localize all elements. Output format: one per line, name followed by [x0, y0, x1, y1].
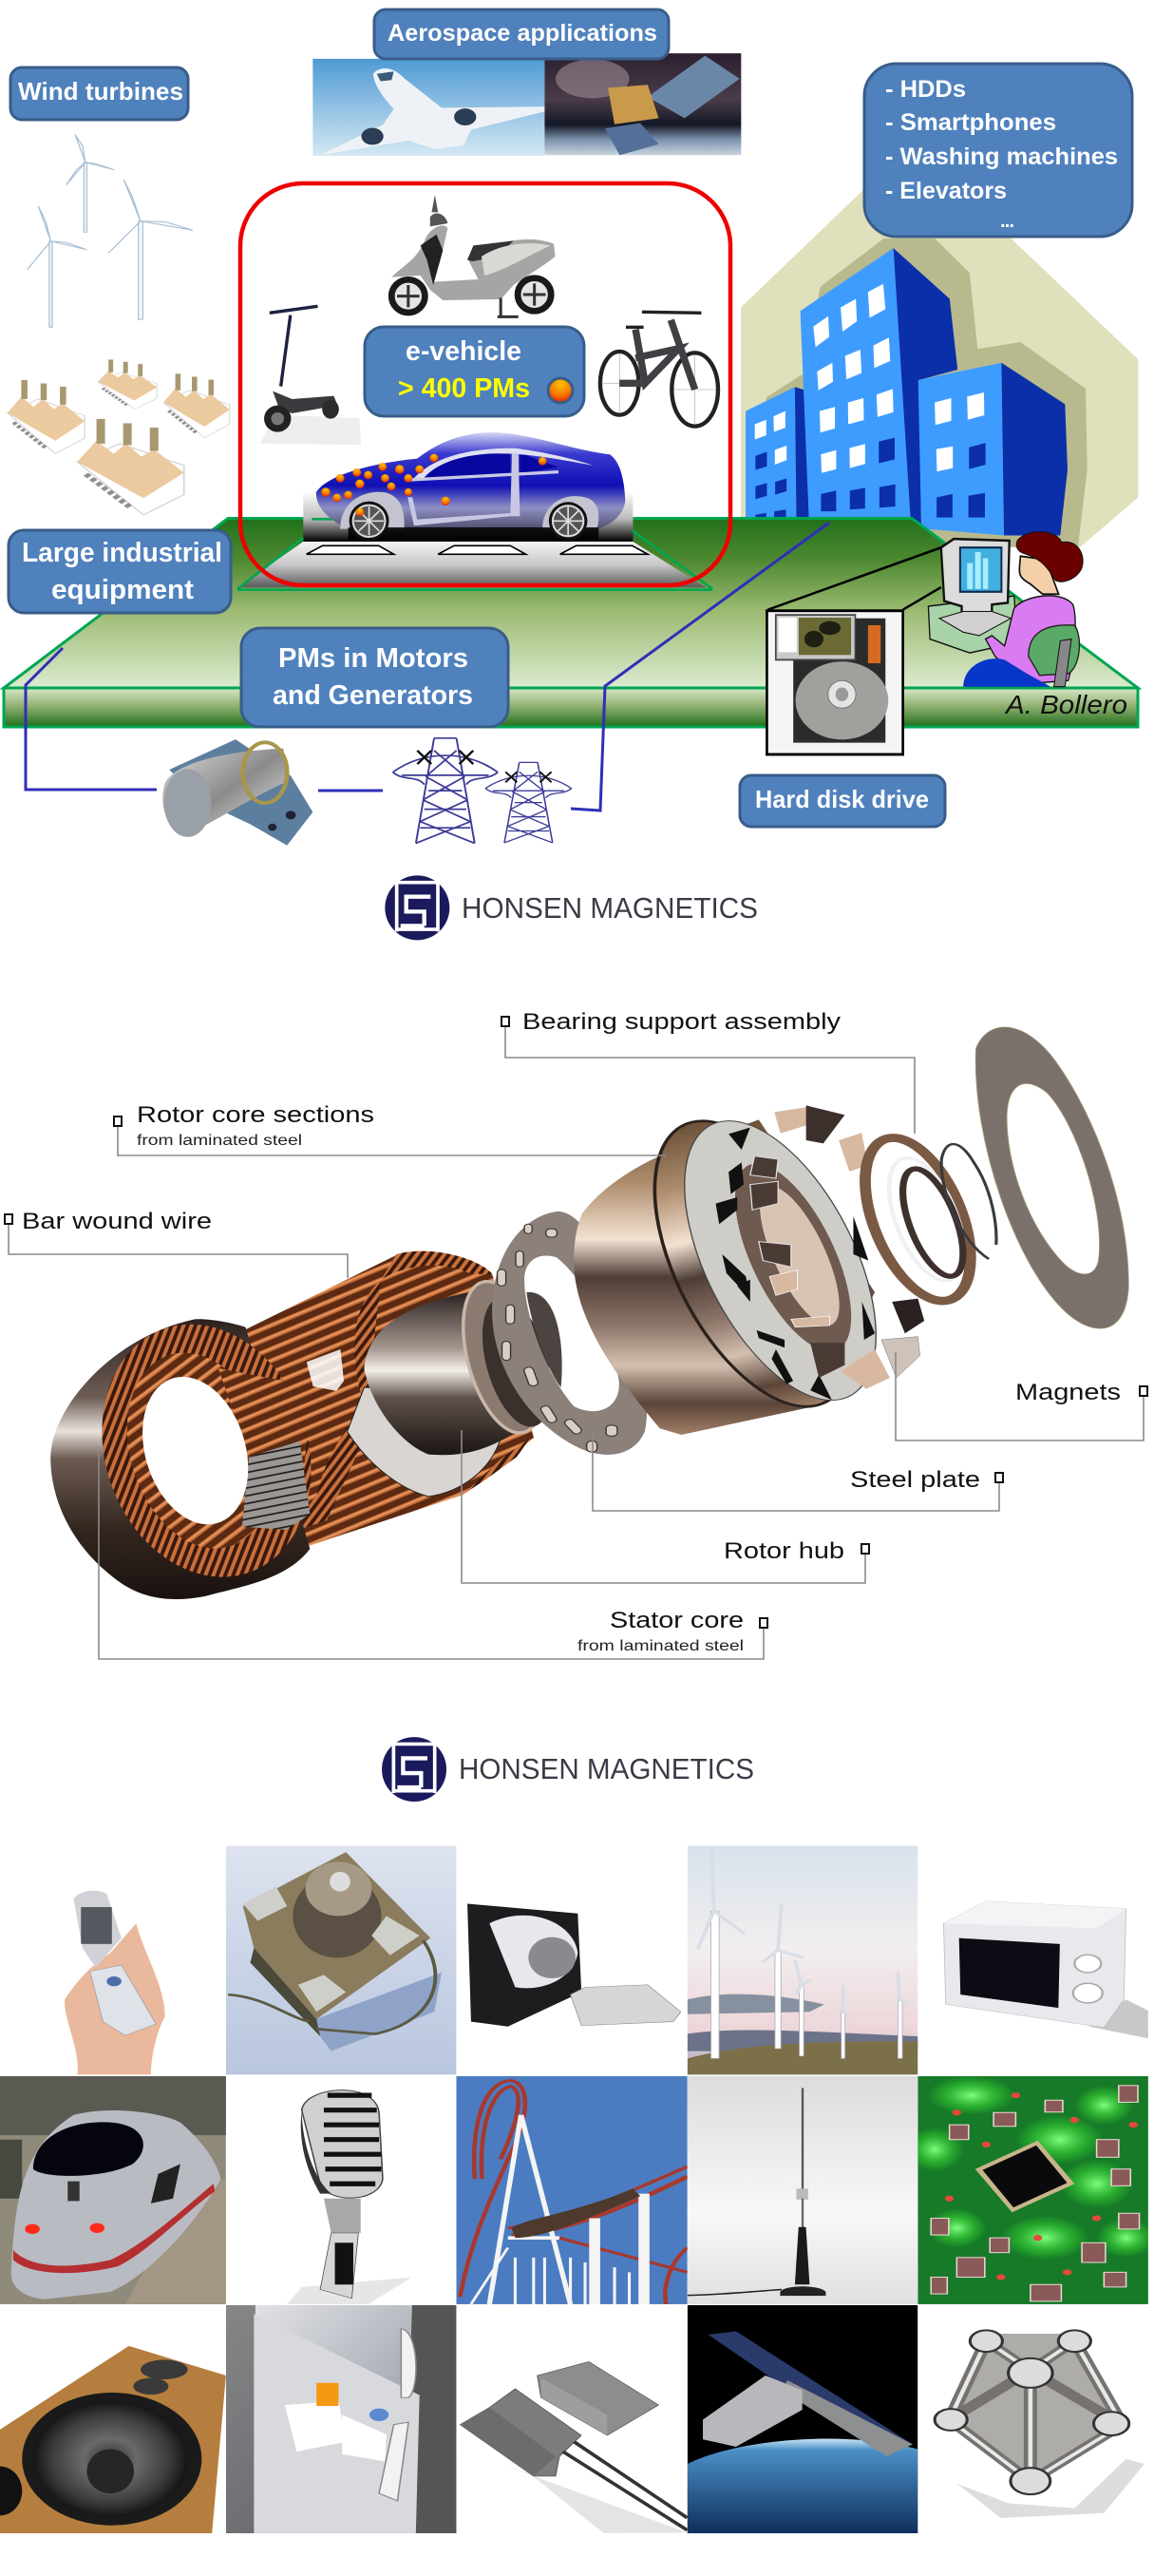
snap ring	[941, 1144, 996, 1259]
label: consumer applications list: - Elevators	[885, 178, 1007, 204]
label: consumer applications list: ...	[1000, 211, 1014, 232]
photo: vintage microphone	[287, 2089, 412, 2304]
rotor hub	[348, 1274, 563, 1497]
logo: Honsen Magnetics top	[385, 875, 758, 940]
label: large industrial equipment: Large industrial	[22, 538, 222, 568]
leader: rotor core sections: Rotor core sections	[137, 1102, 374, 1128]
photo: magnetic balls toy	[933, 2329, 1145, 2518]
photo: magnetic antenna	[688, 2076, 918, 2304]
icon: magnet dot legend	[548, 378, 573, 403]
label: PMs in motors and generators: and Generators	[273, 680, 473, 711]
leader: rotor core sections: from laminated steel	[137, 1133, 302, 1149]
leader: bar wound wire	[5, 1209, 348, 1278]
label: e-vehicle	[365, 327, 584, 416]
leader: magnets	[896, 1352, 1147, 1441]
magnets washer	[975, 1027, 1128, 1328]
label: hard disk drive: Hard disk drive	[755, 785, 929, 813]
photo: wind farm	[688, 1845, 918, 2075]
label: aerospace applications: Aerospace applications	[388, 20, 657, 47]
icon: electric car with magnets	[316, 432, 625, 541]
parking lot	[237, 491, 712, 590]
icon: kick scooter	[260, 306, 361, 445]
icon: factories	[8, 359, 230, 515]
photo: microwave oven	[943, 1900, 1148, 2039]
photo: loudspeaker cabinet	[0, 2345, 226, 2533]
photo: stepper motor	[226, 1845, 456, 2075]
label: e-vehicle: e-vehicle	[406, 336, 521, 367]
copper end ring	[73, 1302, 340, 1599]
label: large industrial equipment	[9, 530, 231, 613]
leader: steel plate	[593, 1430, 1003, 1511]
leader: bar wound wire: Bar wound wire	[22, 1209, 212, 1234]
copper windings	[218, 1251, 534, 1549]
steel plate	[492, 1212, 647, 1455]
label: consumer applications list: - HDDs	[885, 76, 966, 103]
label: consumer applications list: - Smartphones	[885, 109, 1056, 136]
e-vehicle frame	[240, 183, 730, 585]
bearing	[844, 1130, 996, 1309]
icon: motor bearing	[162, 739, 312, 846]
photo: high-speed train	[0, 2076, 226, 2304]
label: consumer applications list	[864, 64, 1132, 237]
photo: hard drive	[467, 1904, 682, 2027]
author credit: A. Bollero	[1004, 690, 1127, 719]
icon: wind turbines	[28, 135, 193, 327]
leader: stator core: Stator core	[610, 1608, 744, 1633]
leader: bearing support assembly	[501, 1009, 915, 1134]
callout: hard disk drive photo	[766, 547, 941, 754]
label: hard disk drive	[740, 775, 945, 827]
rotor core sections	[574, 1103, 924, 1435]
label: large industrial equipment: equipment	[51, 575, 194, 605]
icon: electric bicycle	[600, 312, 718, 427]
logo mark	[385, 875, 449, 940]
photo: reed sensor magnets	[460, 2361, 688, 2533]
label: aerospace applications	[374, 10, 669, 59]
stator core drum	[50, 1319, 310, 1599]
leader: bearing support assembly: Bearing support assembly	[522, 1009, 842, 1035]
label: wind turbines	[10, 67, 188, 120]
logo: Honsen Magnetics bottom	[382, 1737, 754, 1802]
leader: magnets: Magnets	[1015, 1380, 1121, 1405]
stator with bar wound wire	[50, 1251, 534, 1599]
logo mark	[382, 1737, 446, 1802]
leader: rotor hub: Rotor hub	[724, 1538, 844, 1564]
icon: woman at computer	[928, 532, 1083, 687]
photo: refrigerator magnets	[226, 2305, 456, 2533]
logo wordmark: HONSEN MAGNETICS	[462, 891, 758, 925]
leader: rotor core sections	[114, 1102, 666, 1155]
label: consumer applications list: - Washing machines	[885, 143, 1118, 170]
leader: stator core: from laminated steel	[577, 1638, 744, 1654]
photo: satellite over earth	[688, 2305, 918, 2533]
leader: rotor hub	[462, 1430, 869, 1583]
photo: airplane	[312, 59, 544, 156]
panel: photo grid of magnet applications	[0, 1845, 1154, 2533]
label: e-vehicle: > 400 PMs	[398, 373, 530, 404]
icon: power pylons	[393, 738, 572, 843]
leader: steel plate: Steel plate	[850, 1467, 980, 1493]
logo wordmark: HONSEN MAGNETICS	[459, 1752, 754, 1785]
panel: exploded motor diagram	[5, 1009, 1147, 1659]
photo: flip phone in hand	[65, 1891, 165, 2075]
photo: roller coaster	[456, 2076, 688, 2304]
green platform	[4, 519, 1138, 727]
photo: circuit board	[918, 2076, 1148, 2304]
buildings and city backdrop	[741, 176, 1138, 549]
panel: permanent magnet applications scene	[4, 10, 1138, 846]
photo: satellite	[544, 53, 741, 155]
leader: stator core	[99, 1452, 767, 1659]
blue power lines	[26, 523, 829, 811]
label: PMs in motors and generators	[241, 628, 508, 727]
icon: electric scooter	[391, 195, 556, 316]
label: wind turbines: Wind turbines	[18, 77, 183, 105]
label: PMs in motors and generators: PMs in Motors	[278, 643, 468, 674]
